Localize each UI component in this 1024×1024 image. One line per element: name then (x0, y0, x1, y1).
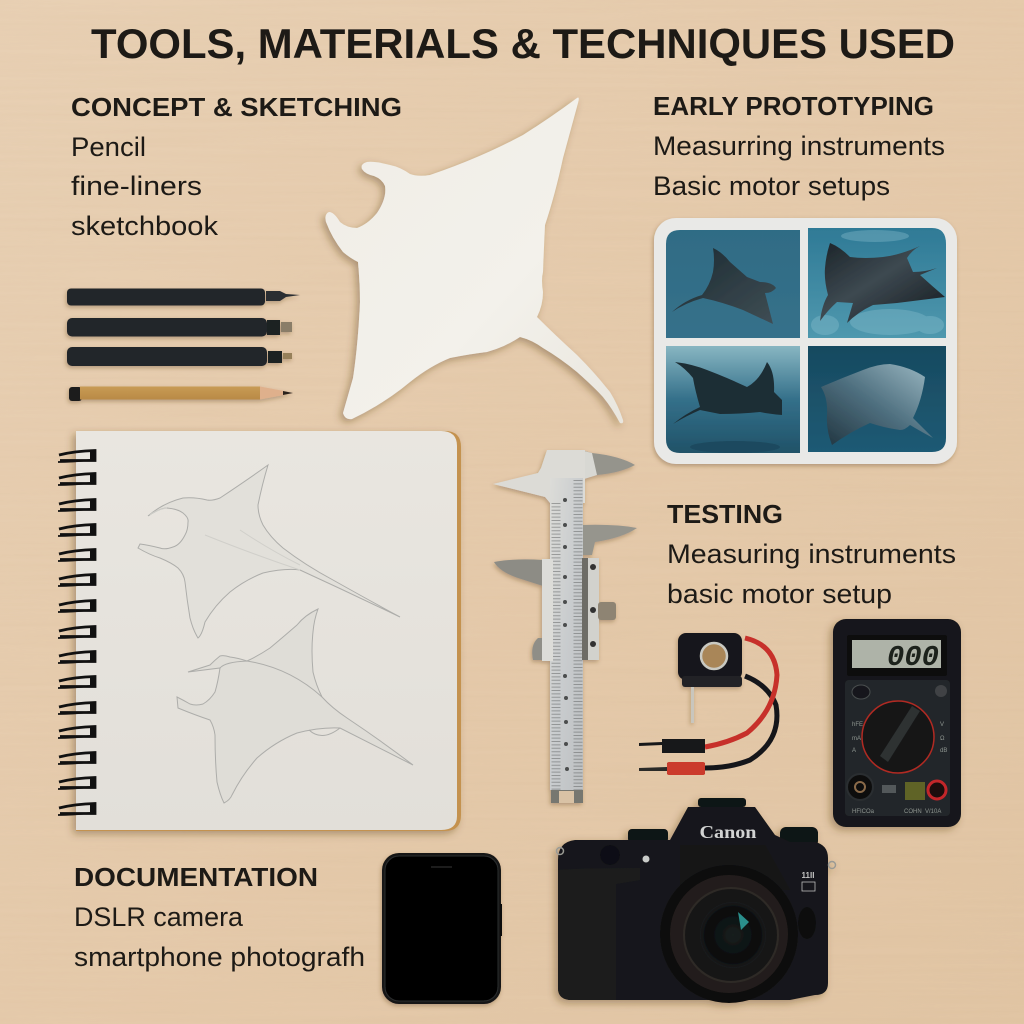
text block: concept and sketching: sketchbook (71, 211, 219, 241)
photo: bottom right (808, 346, 946, 452)
multimeter: dB (940, 748, 947, 754)
motor body (678, 633, 742, 723)
photo card with four manta photos (654, 218, 957, 464)
text block: early prototyping (653, 91, 945, 201)
vernier caliper (493, 450, 637, 803)
multimeter: hFE (852, 722, 863, 728)
meter jacks and buttons (847, 774, 873, 800)
sketch: upper manta (138, 465, 400, 638)
text block: testing (667, 499, 956, 609)
pen 3 (67, 347, 292, 366)
spiral binding (58, 450, 96, 815)
lower right jaw (583, 525, 637, 555)
multimeter: Ω (940, 736, 945, 742)
pen 2 (67, 318, 292, 336)
beam rivets (563, 498, 569, 771)
text block: concept and sketching (71, 92, 402, 241)
dslr camera (556, 798, 836, 1003)
smartphone (382, 853, 502, 1004)
upper right jaw (583, 451, 635, 478)
brand: Canon (700, 822, 756, 842)
photo: top left (666, 230, 800, 338)
lower left jaw (494, 559, 543, 586)
sketch: lower manta (177, 609, 413, 803)
text block: documentation: smartphone photografh (74, 942, 365, 972)
meter display (847, 635, 947, 676)
multimeter: COHN (904, 809, 922, 815)
pens and pencil (67, 288, 300, 401)
meter dial (862, 701, 934, 773)
text block: documentation: DOCUMENTATION (74, 862, 318, 892)
pencil (69, 386, 293, 401)
beam scale ticks (556, 480, 578, 790)
text block: early prototyping: EARLY PROTOTYPING (653, 91, 934, 121)
wires (705, 676, 777, 768)
text block: concept and sketching: CONCEPT & SKETCHING (71, 92, 402, 122)
motor with wires (639, 633, 777, 775)
caliper slider (532, 558, 616, 661)
pen 1 (67, 288, 300, 306)
camera lens (660, 865, 798, 1003)
model badge: 11II (802, 871, 814, 880)
text block: early prototyping: Measurring instruments (653, 131, 945, 161)
text block: documentation (74, 862, 365, 972)
text block: concept and sketching: Pencil (71, 132, 146, 162)
photo: top right (808, 228, 946, 338)
title: TOOLS, MATERIALS & TECHNIQUES USED (91, 20, 955, 67)
beam (550, 478, 583, 790)
multimeter (833, 619, 961, 827)
spiral sketchbook (58, 431, 461, 831)
multimeter: V (940, 722, 944, 728)
white manta ray model (325, 98, 623, 423)
text block: early prototyping: Basic motor setups (653, 171, 890, 201)
text block: concept and sketching: fine-liners (71, 171, 202, 201)
text block: testing: basic motor setup (667, 579, 892, 609)
text block: documentation: DSLR camera (74, 902, 244, 932)
multimeter: V/10A (925, 809, 941, 815)
meter display: 000 (887, 641, 939, 674)
model badge (802, 871, 815, 891)
multimeter: A (852, 748, 856, 754)
photo: bottom left (666, 346, 800, 453)
multimeter: HFICOa (852, 809, 875, 815)
text block: testing: Measuring instruments (667, 539, 956, 569)
probes (639, 739, 705, 753)
multimeter: mA (852, 736, 861, 742)
upper left jaw and head (493, 450, 585, 503)
text block: testing: TESTING (667, 499, 783, 529)
